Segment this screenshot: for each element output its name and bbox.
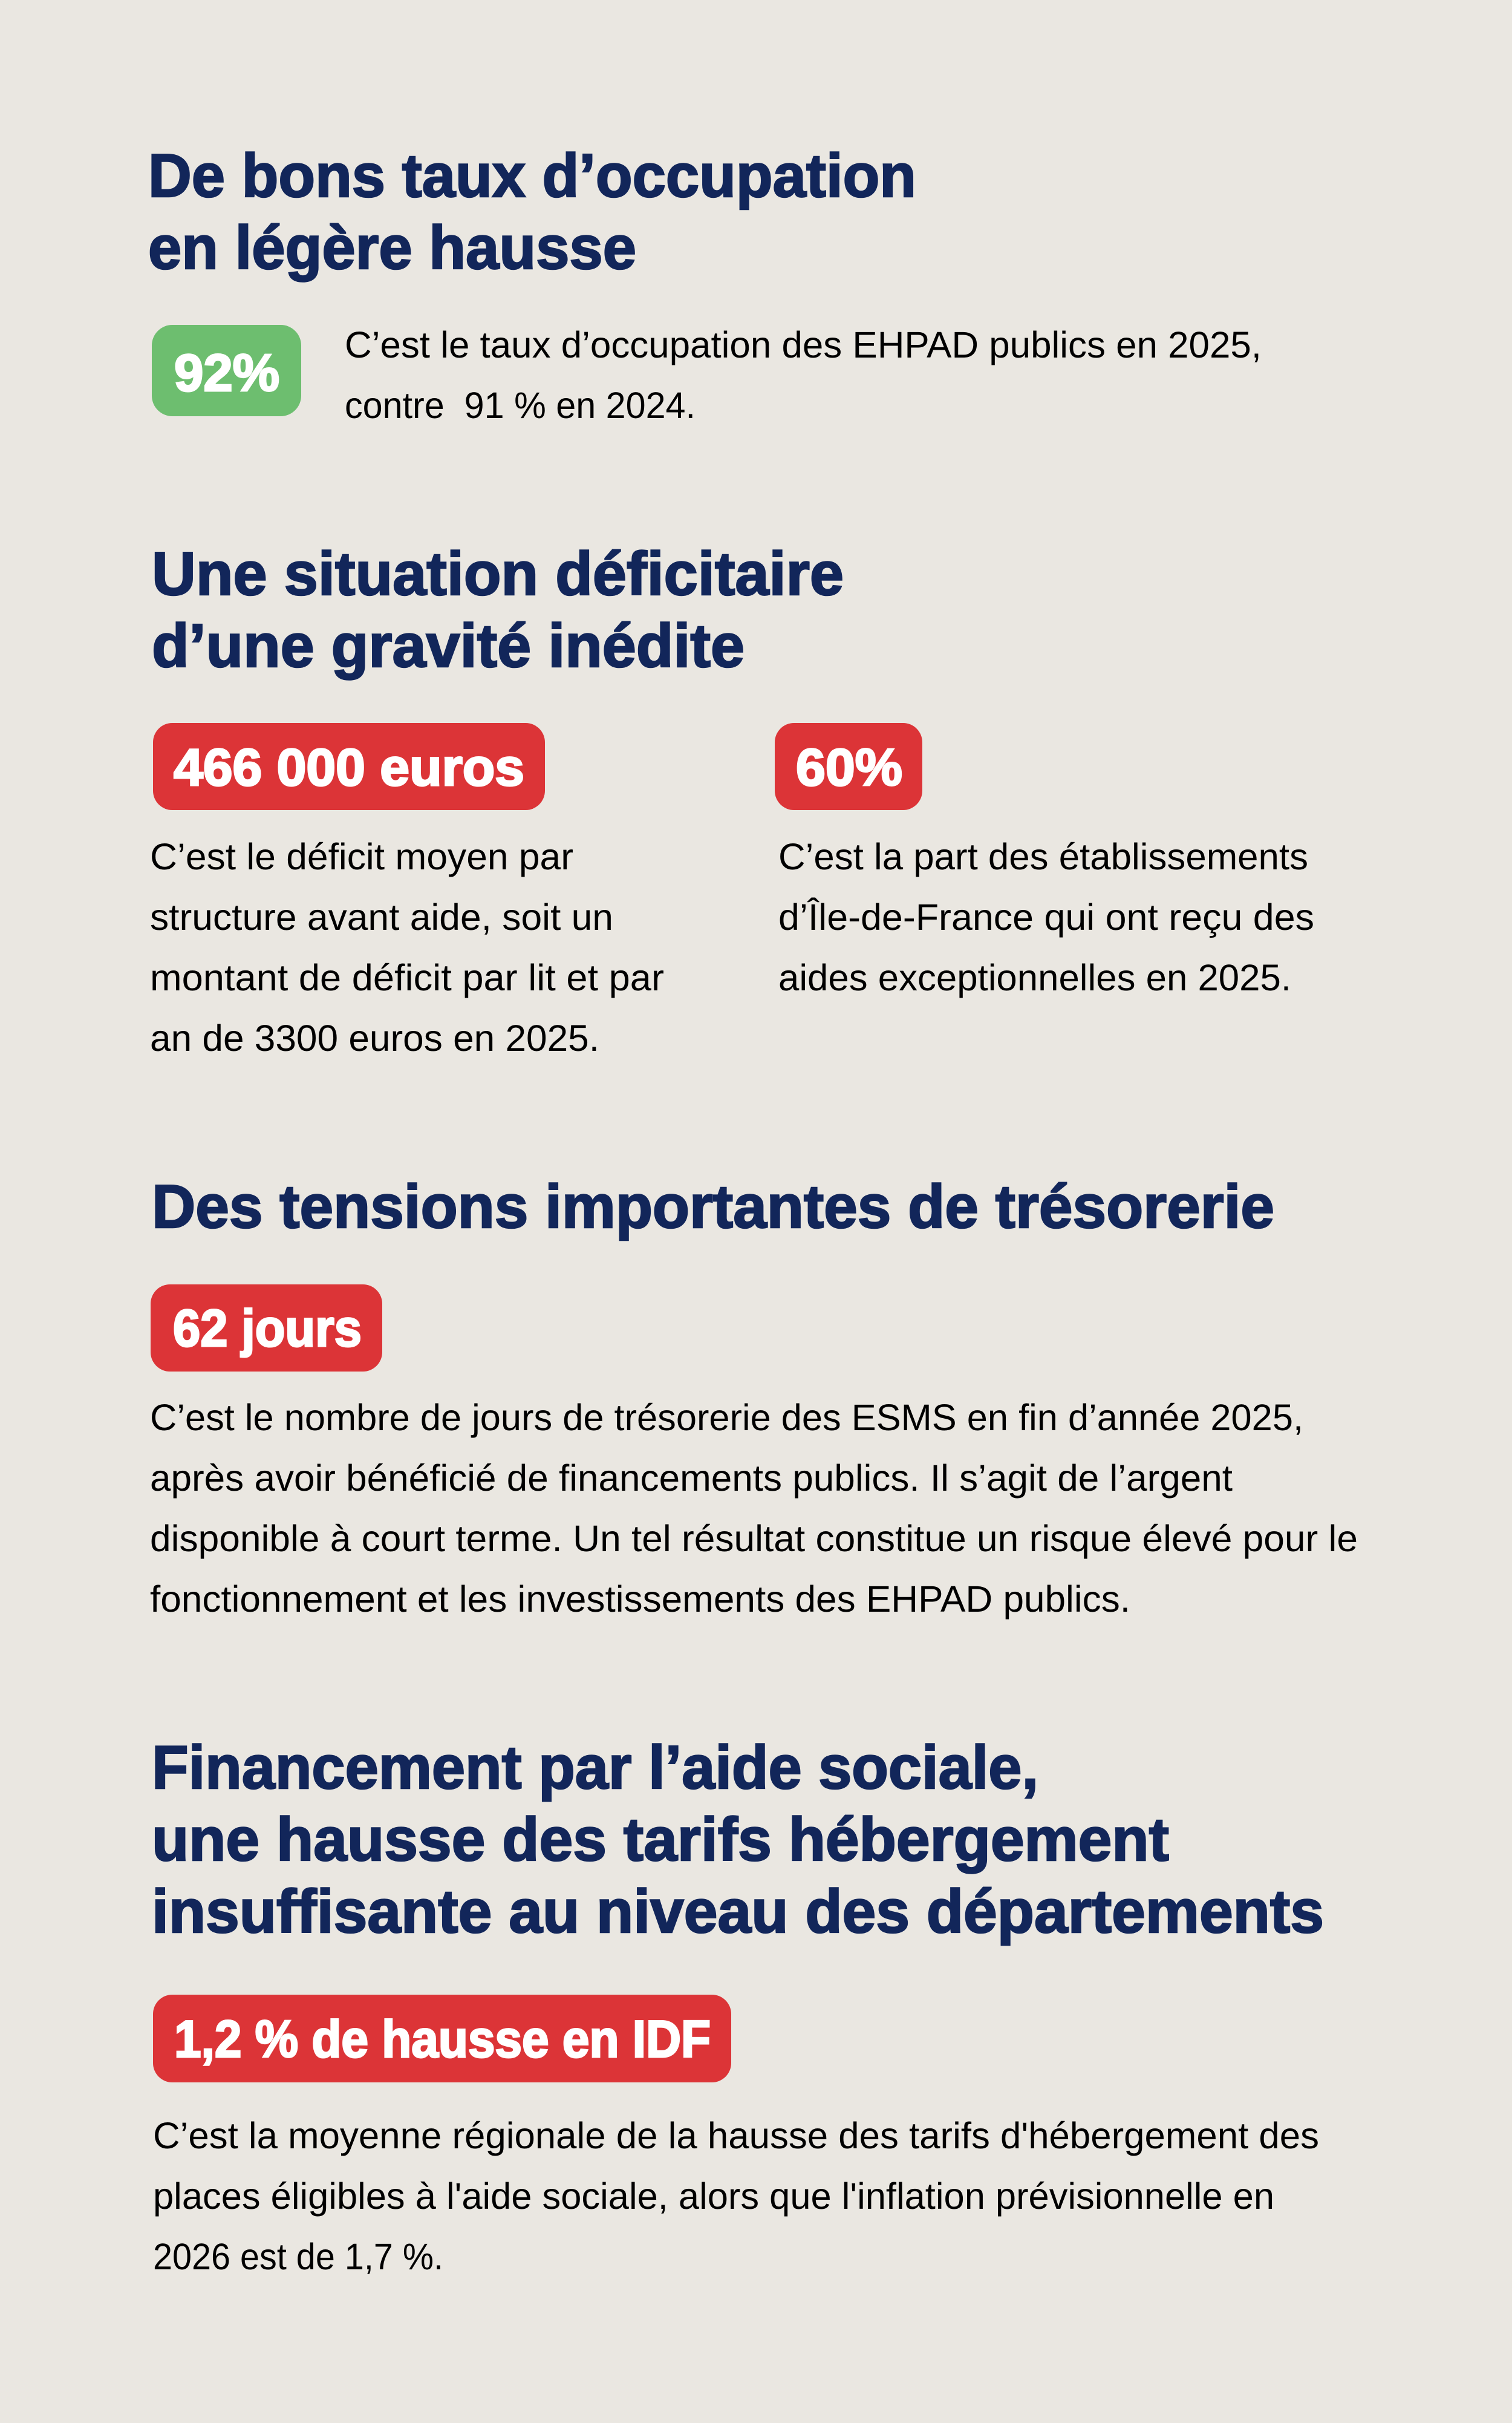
text block: average deficit: montant de déficit par lit et par: [150, 957, 664, 998]
heading: Une situation déficitaire: Une situation déficitaire: [152, 540, 844, 608]
text block: regional average: [153, 2115, 1319, 2277]
badge: 60%: [775, 723, 922, 810]
badge: 92%: [152, 325, 301, 416]
heading: Financement par l'aide sociale: insuffisante au niveau des départements: [152, 1878, 1324, 1946]
text block: average deficit: structure avant aide, soit un: [150, 897, 613, 938]
text block: occupancy rate: [345, 324, 1262, 426]
heading: De bons taux d'occupation: en légère hausse: [148, 214, 636, 282]
text block: cash days: disponible à court terme. Un tel résultat constitue un risque élevé pour le: [150, 1518, 1358, 1559]
heading: Une situation déficitaire: [152, 540, 844, 680]
heading: Une situation déficitaire: d’une gravité inédite: [152, 612, 745, 680]
text block: average deficit: C’est le déficit moyen par: [150, 836, 573, 877]
text block: regional average: C’est la moyenne régionale de la hausse des tarifs d'hébergement des: [153, 2115, 1319, 2156]
badge: 60%: 60%: [796, 739, 902, 797]
text block: occupancy rate: contre 91 % en 2024.: [345, 385, 696, 426]
text block: regional average: 2026 est de 1,7 %.: [153, 2236, 443, 2277]
badge: 1,2 % de hausse en IDF: [153, 1995, 731, 2082]
badge: 466 000 euros: [153, 723, 545, 810]
text block: average deficit: an de 3300 euros en 2025.: [150, 1018, 599, 1059]
heading: Financement par l'aide sociale: [152, 1734, 1324, 1946]
text block: share of establishments: [778, 836, 1314, 998]
heading: De bons taux d'occupation: [148, 142, 916, 282]
text block: regional average: places éligibles à l'aide sociale, alors que l'inflation prévisionnelle en: [153, 2176, 1274, 2217]
badge: 62 jours: 62 jours: [173, 1300, 362, 1358]
heading: Financement par l'aide sociale: Financement par l’aide sociale,: [152, 1734, 1038, 1802]
badge: 466 000 euros: 466 000 euros: [174, 739, 524, 797]
text block: cash days: fonctionnement et les investissements des EHPAD publics.: [150, 1578, 1130, 1620]
heading: Des tensions importantes de trésorerie: Des tensions importantes de trésorerie: [152, 1173, 1274, 1241]
text block: share of establishments: C’est la part des établissements: [778, 836, 1308, 877]
text block: share of establishments: aides exceptionnelles en 2025.: [778, 957, 1291, 998]
text block: occupancy rate: C’est le taux d’occupation des EHPAD publics en 2025,: [345, 324, 1262, 365]
text block: cash days: après avoir bénéficié de financements publics. Il s’agit de l’argent: [150, 1457, 1233, 1499]
badge: 92%: 92%: [174, 344, 279, 402]
text block: cash days: C’est le nombre de jours de trésorerie des ESMS en fin d’année 2025,: [150, 1397, 1303, 1438]
heading: De bons taux d'occupation: De bons taux d’occupation: [148, 142, 916, 210]
badge: 62 jours: [151, 1284, 382, 1372]
heading: Financement par l'aide sociale: une hausse des tarifs hébergement: [152, 1806, 1169, 1874]
text block: average deficit: [150, 836, 664, 1059]
text block: cash days: [150, 1397, 1358, 1620]
badge: 1,2 % de hausse en IDF: 1,2 % de hausse en IDF: [174, 2010, 711, 2068]
text block: share of establishments: d’Île-de-France qui ont reçu des: [778, 897, 1314, 938]
